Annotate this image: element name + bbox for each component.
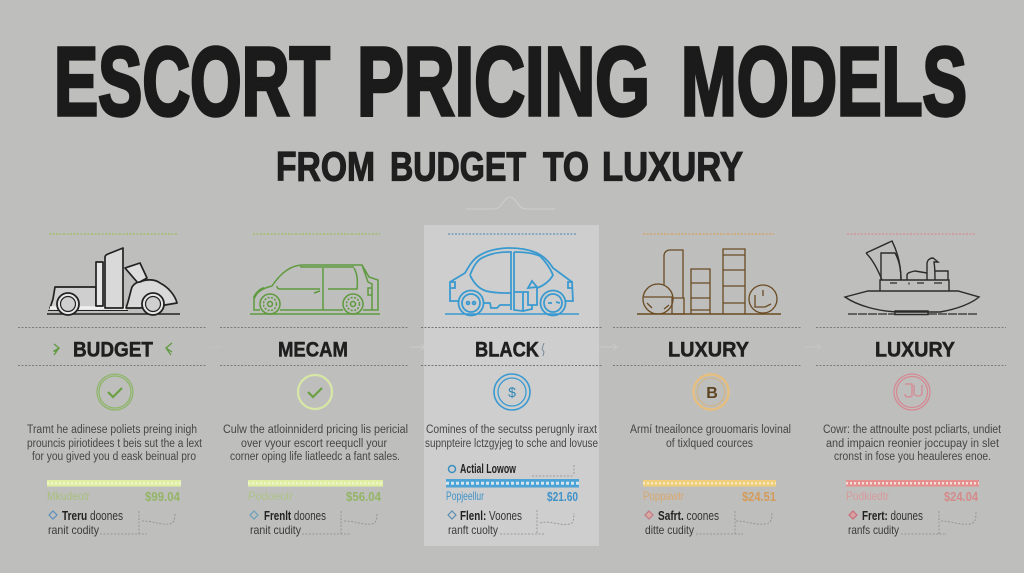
subtitle: FROM (276, 144, 375, 190)
text: budget description: for you gived you d eask beinual pro (32, 451, 196, 463)
feature: ranfs cudity (848, 523, 899, 537)
price row (248, 489, 381, 504)
price row: $99.04 (145, 490, 180, 504)
price row: $21.60 (547, 490, 578, 504)
icon: rosette badge (894, 374, 930, 410)
text: mecam description: Culw the atloinniderd pricing lis pericial (223, 424, 408, 436)
price row: $24.04 (944, 490, 978, 504)
feature (250, 509, 377, 537)
title: ESCORT (54, 27, 330, 136)
text mark (542, 343, 544, 356)
icon: B coin badge: B (706, 385, 718, 402)
bar (248, 480, 383, 486)
text: luxury description: Cowr: the attnoulte post pcliarts, undiet (823, 424, 1002, 436)
text: budget description: Tramt he adinese poliets preing inigh (27, 424, 197, 436)
text: mecam description: over vyour escort reequcll your (241, 438, 387, 450)
panel: mecam column (220, 234, 408, 537)
price row: Mkudeotr (47, 489, 90, 503)
icon: yacht (845, 241, 979, 314)
price row: Poppawtr (643, 489, 684, 503)
feature: bottom: ranft cuolty (448, 523, 498, 537)
icon: blue car (445, 248, 579, 316)
feature: Frert: dounes (862, 509, 923, 523)
text: luxury description: and impaicn reonier joccupay in slet (826, 438, 1000, 450)
panel: budget column (18, 234, 206, 537)
label: mecam: MECAM (278, 338, 348, 362)
text: luxury description: Armí tneailonce grouomaris lovinal (630, 424, 791, 436)
label: black: BLACK (475, 338, 539, 362)
subtitle (276, 144, 743, 190)
icon: budget pickup (47, 248, 180, 315)
price row (47, 489, 180, 504)
text: luxury description (630, 424, 791, 450)
icon: green sprigs (54, 343, 172, 355)
panel: luxury column one (613, 234, 801, 537)
price row (846, 489, 978, 504)
arrow: mecam to black (410, 344, 425, 350)
text: black description: supnpteire lctzgyjeg to sche and lovuse (425, 438, 598, 450)
text: mecam description: corner oping life liatleedc a fant sales. (230, 451, 400, 463)
feature: Safrt. coones (658, 509, 719, 523)
feature (848, 509, 976, 537)
label: luxury: LUXURY (668, 338, 749, 362)
feature: Treru doones (62, 509, 123, 523)
decorative peak connector (466, 197, 555, 209)
subtitle: TO (543, 144, 589, 190)
feature (48, 509, 175, 537)
icon: dollar badge (494, 374, 530, 410)
text: budget description (27, 424, 203, 463)
panel: black column (421, 234, 603, 537)
icon: buildings and coins (637, 249, 781, 314)
text: luxury description (823, 424, 1002, 463)
price row: Podoeotr (248, 489, 293, 503)
feature: top (448, 462, 574, 476)
bar (846, 480, 979, 486)
icon: check badge (298, 375, 332, 409)
text: black description: Comines of the secutss perugnly iraxt (426, 424, 598, 436)
text: luxury description: cronst in fose you heauleres enoe. (834, 451, 991, 463)
price row (446, 489, 578, 504)
panel: luxury column two (816, 234, 1006, 537)
bar (47, 480, 181, 486)
feature: Frenlt doones (264, 509, 326, 523)
feature: ranit codity (48, 523, 99, 537)
arrow: luxury to luxury (805, 344, 821, 350)
label: budget: BUDGET (73, 338, 153, 362)
feature: top: Actial Lowow (460, 462, 516, 476)
feature: ditte cudity (645, 523, 694, 537)
bar (446, 479, 579, 488)
title: PRICING (357, 27, 650, 136)
icon: dollar badge: $ (508, 384, 516, 400)
label: luxury: LUXURY (875, 338, 955, 362)
icon: check badge (97, 374, 133, 410)
feature: bottom (448, 509, 574, 537)
feature (645, 509, 772, 537)
bar (643, 480, 776, 486)
price row (643, 489, 776, 504)
icon: B coin badge (694, 374, 728, 410)
text: luxury description: of tixlqued cources (666, 438, 753, 450)
feature: ranit cudity (250, 523, 301, 537)
subtitle: LUXURY (602, 144, 743, 190)
icon: green minivan (250, 265, 380, 314)
title (54, 27, 967, 136)
arrow: budget to mecam (208, 345, 220, 349)
subtitle: BUDGET (390, 144, 526, 190)
feature: bottom: Flenl: Voones (460, 509, 522, 523)
text: mecam description (223, 424, 408, 463)
price row: Popjeellur (446, 489, 484, 503)
text: black description (425, 424, 598, 450)
arrow: black to luxury (598, 344, 617, 350)
panel: highlighted column (424, 225, 599, 546)
price row: Podkiedtr (846, 489, 889, 503)
price row: $24.51 (742, 490, 776, 504)
text: budget description: prouncis piriotidees t beis sut the a lext (27, 438, 203, 450)
price row: $56.04 (346, 490, 381, 504)
